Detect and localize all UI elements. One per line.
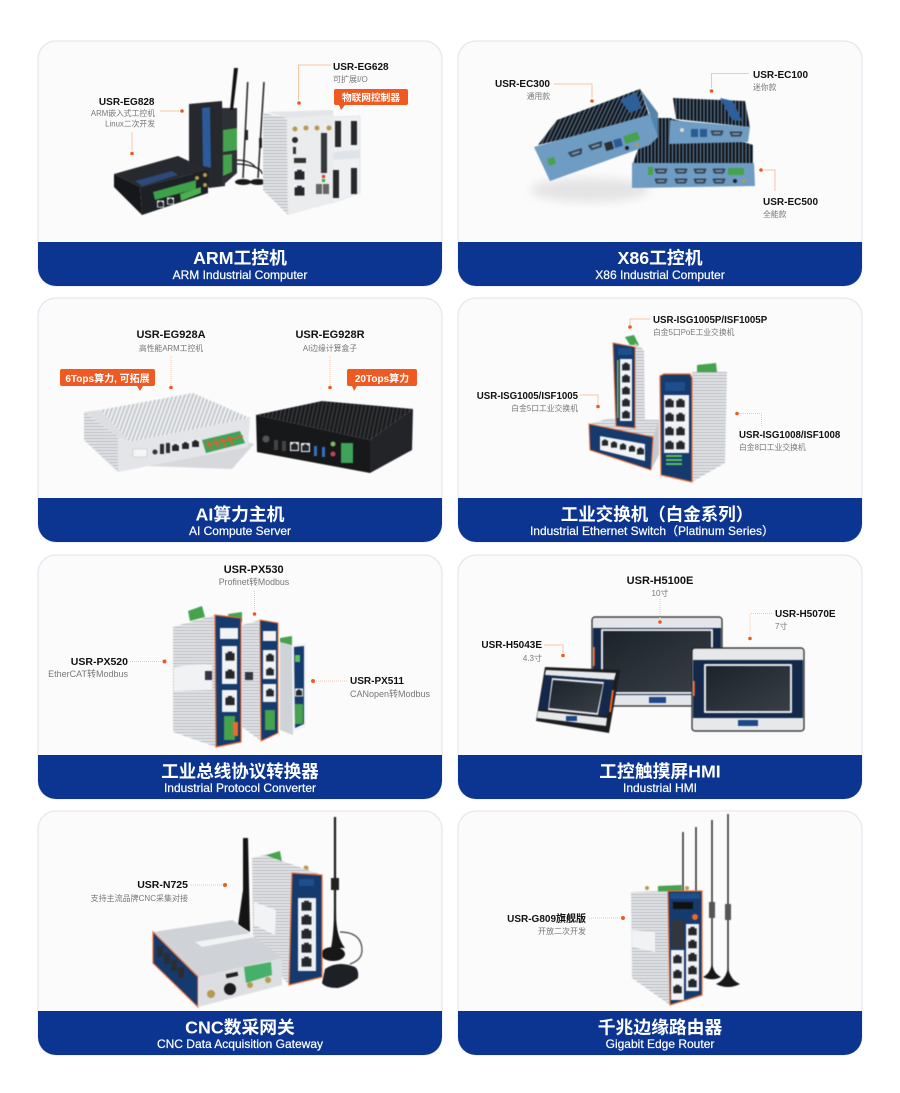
callout: USR-PX511 label — [311, 676, 431, 699]
callout: USR-EG628 label: USR-EG628 — [333, 62, 389, 73]
callout: USR-PX511 label: CANopen转Modbus — [350, 688, 431, 699]
panel: ARM industrial computer — [38, 41, 442, 286]
callout: USR-EG928R label: USR-EG928R — [295, 329, 365, 341]
icon: five-port PoE vertical switch — [613, 335, 645, 428]
card background — [458, 811, 862, 1055]
callout: USR-H5100E label: USR-H5100E — [627, 575, 693, 587]
callout: USR-PX530 label: USR-PX530 — [224, 564, 284, 576]
callout: USR-EG628 label — [297, 62, 408, 110]
callout: USR-EG928A label: 高性能ARM工控机 — [139, 343, 203, 353]
callout: USR-EG928R label: AI边缘计算盒子 — [303, 343, 357, 353]
callout: USR-EG928A label: 6Tops算力, 可拓展 — [65, 372, 150, 385]
icon: USR-PX511 narrow converter — [280, 636, 306, 735]
heading banner: 千兆边缘路由器: Gigabit Edge Router — [606, 1037, 714, 1051]
panel: gigabit edge router — [458, 811, 862, 1055]
card background — [458, 298, 862, 542]
panel: AI compute server — [38, 298, 442, 542]
callout: USR-ISG1008/ISF1008 label: USR-ISG1008/ISF1008 — [739, 430, 841, 441]
heading banner: ARM工控机: ARM Industrial Computer — [173, 268, 307, 282]
heading banner: 工业总线协议转换器: Industrial Protocol Converter — [164, 781, 316, 795]
card background — [458, 555, 862, 799]
callout: USR-H5070E label: USR-H5070E — [775, 609, 836, 620]
callout: USR-EG828 label — [91, 97, 184, 155]
callout: USR-ISG1005/ISF1005 label: USR-ISG1005/ISF1005 — [477, 391, 579, 402]
callout: USR-ISG1008/ISF1008 label — [735, 412, 841, 452]
icon: eight-port switch — [660, 363, 727, 482]
callout: USR-PX520 label — [48, 656, 166, 679]
icon: USR-PX530 converter — [228, 612, 278, 741]
callout: USR-N725 label: USR-N725 — [137, 879, 188, 891]
icon: USR-G809 router — [631, 885, 702, 1005]
callout: USR-N725 label: 支持主流品牌CNC采集对接 — [91, 893, 188, 903]
card background — [38, 555, 442, 799]
callout: USR-EC100 label: USR-EC100 — [753, 70, 808, 81]
callout: USR-EG928A label: USR-EG928A — [136, 329, 206, 341]
panel: X86 industrial computer — [458, 41, 862, 286]
callout: USR-PX520 label: USR-PX520 — [71, 656, 128, 668]
callout: USR-EC300 label — [495, 79, 594, 103]
callout: USR-PX511 label: USR-PX511 — [350, 676, 404, 687]
icon: USR-EG928R black box — [256, 401, 413, 473]
callout: USR-ISG1005/ISF1005 label: 白金5口工业交换机 — [511, 403, 578, 413]
heading banner: 工控触摸屏HMI: Industrial HMI — [623, 781, 697, 795]
icon: USR-EC300 tilted box — [534, 89, 658, 181]
heading banner: 工业总线协议转换器: 工业总线协议转换器 — [161, 762, 319, 782]
callout: USR-EG828 label: ARM嵌入式工控机 — [91, 108, 155, 118]
panel: industrial HMI — [458, 555, 862, 799]
panel: industrial ethernet switch — [458, 298, 862, 542]
callout: USR-H5043E label — [481, 640, 565, 663]
card background — [458, 41, 862, 286]
heading banner: 千兆边缘路由器: 千兆边缘路由器 — [598, 1018, 722, 1038]
icon: black antennas and GPS puck — [238, 817, 362, 988]
callout: USR-H5100E label: 10寸 — [652, 588, 668, 598]
icon: USR-EC100 mini box — [669, 98, 750, 144]
icon: USR-EG828 vertical unit with antennas — [189, 68, 266, 188]
heading banner: X86工控机 — [458, 242, 862, 286]
heading banner: 工控触摸屏HMI — [458, 755, 862, 799]
callout: USR-ISG1005/ISF1005 label — [477, 391, 600, 413]
heading banner: AI算力主机: AI算力主机 — [196, 504, 285, 524]
callout: USR-EG828 label: Linux二次开发 — [105, 118, 155, 128]
heading banner: 工业交换机（白金系列）: Industrial Ethernet Switch（Platinum Series） — [530, 524, 774, 538]
heading banner: 工业交换机（白金系列） — [458, 498, 862, 542]
callout: USR-H5070E label — [748, 609, 836, 640]
callout: USR-EC500 label — [759, 168, 818, 219]
icon: USR-EG828 horizontal unit — [114, 156, 208, 215]
callout: USR-H5043E label: USR-H5043E — [481, 640, 542, 651]
icon: USR-PX520 converter — [173, 606, 241, 747]
icon: four whip antennas — [683, 814, 740, 987]
callout: USR-ISG1008/ISF1008 label: 白金8口工业交换机 — [739, 442, 806, 452]
callout: USR-EC500 label: 全能款 — [763, 209, 787, 219]
callout: USR-G809 label: USR-G809旗舰版 — [507, 912, 586, 925]
callout: USR-ISG1005P/ISF1005P label — [628, 315, 768, 337]
icon: USR-EC500 large box — [632, 118, 755, 188]
heading banner: X86工控机: X86工控机 — [618, 248, 703, 268]
icon: USR-H5070E 7-inch screen — [692, 648, 804, 731]
callout: USR-EG628 label: 物联网控制器 — [342, 91, 400, 104]
callout: USR-EG928A label — [60, 329, 206, 391]
heading banner: 千兆边缘路由器 — [458, 1011, 862, 1055]
callout: USR-H5070E label: 7寸 — [775, 621, 787, 631]
callout: USR-PX530 label — [219, 564, 290, 616]
heading banner: ARM工控机 — [38, 242, 442, 286]
callout: USR-G809 label: 开放二次开发 — [538, 926, 586, 936]
callout: USR-EC100 label — [710, 70, 808, 93]
heading banner: 工业总线协议转换器 — [38, 755, 442, 799]
heading banner: AI算力主机: AI Compute Server — [189, 524, 291, 538]
panel: industrial protocol converter — [38, 555, 442, 799]
heading banner: CNC数采网关: CNC Data Acquisition Gateway — [157, 1037, 323, 1051]
icon: USR-H5043E 4.3-inch screen — [536, 667, 620, 733]
callout: USR-EC300 label: USR-EC300 — [495, 79, 550, 90]
callout: USR-ISG1005P/ISF1005P label: USR-ISG1005P/ISF1005P — [653, 315, 768, 326]
heading banner: AI算力主机 — [38, 498, 442, 542]
callout: USR-N725 label — [91, 879, 227, 903]
panel: CNC data acquisition gateway — [38, 811, 442, 1055]
card background — [38, 811, 442, 1055]
callout: USR-H5043E label: 4.3寸 — [523, 653, 542, 663]
icon: USR-EG928A silver box — [84, 393, 254, 472]
callout: USR-PX530 label: Profinet转Modbus — [219, 576, 290, 587]
callout: USR-PX520 label: EtherCAT转Modbus — [48, 668, 128, 679]
callout: USR-EC300 label: 通用款 — [527, 91, 550, 101]
callout: USR-EG628 label: 可扩展I/O — [333, 74, 368, 84]
callout: USR-ISG1005P/ISF1005P label: 白金5口PoE工业交换机 — [653, 327, 735, 337]
card background — [38, 298, 442, 542]
callout: USR-EG928R label — [295, 329, 417, 391]
icon: USR-N725 vertical gateway — [252, 851, 322, 985]
heading banner: 工业交换机（白金系列）: 工业交换机（白金系列） — [561, 504, 753, 524]
heading banner: CNC数采网关: CNC数采网关 — [185, 1018, 295, 1038]
heading banner: CNC数采网关 — [38, 1011, 442, 1055]
callout: USR-G809 label — [507, 912, 625, 936]
heading banner: X86工控机: X86 Industrial Computer — [595, 268, 725, 282]
icon: USR-H5100E 10-inch screen — [592, 617, 722, 706]
callout: USR-EG928R label: 20Tops算力 — [355, 372, 409, 385]
heading banner: 工控触摸屏HMI: 工控触摸屏HMI — [599, 762, 721, 782]
callout: USR-H5100E label — [627, 575, 693, 624]
heading banner: ARM工控机: ARM工控机 — [193, 248, 287, 268]
card background — [38, 41, 442, 286]
icon: USR-N725 horizontal gateway — [153, 920, 282, 1007]
callout: USR-EC100 label: 迷你款 — [753, 82, 777, 92]
callout: USR-EG828 label: USR-EG828 — [99, 97, 155, 108]
icon: USR-EG628 controller — [263, 110, 360, 215]
icon: five-port horizontal switch — [589, 418, 659, 470]
callout: USR-EC500 label: USR-EC500 — [763, 197, 818, 208]
